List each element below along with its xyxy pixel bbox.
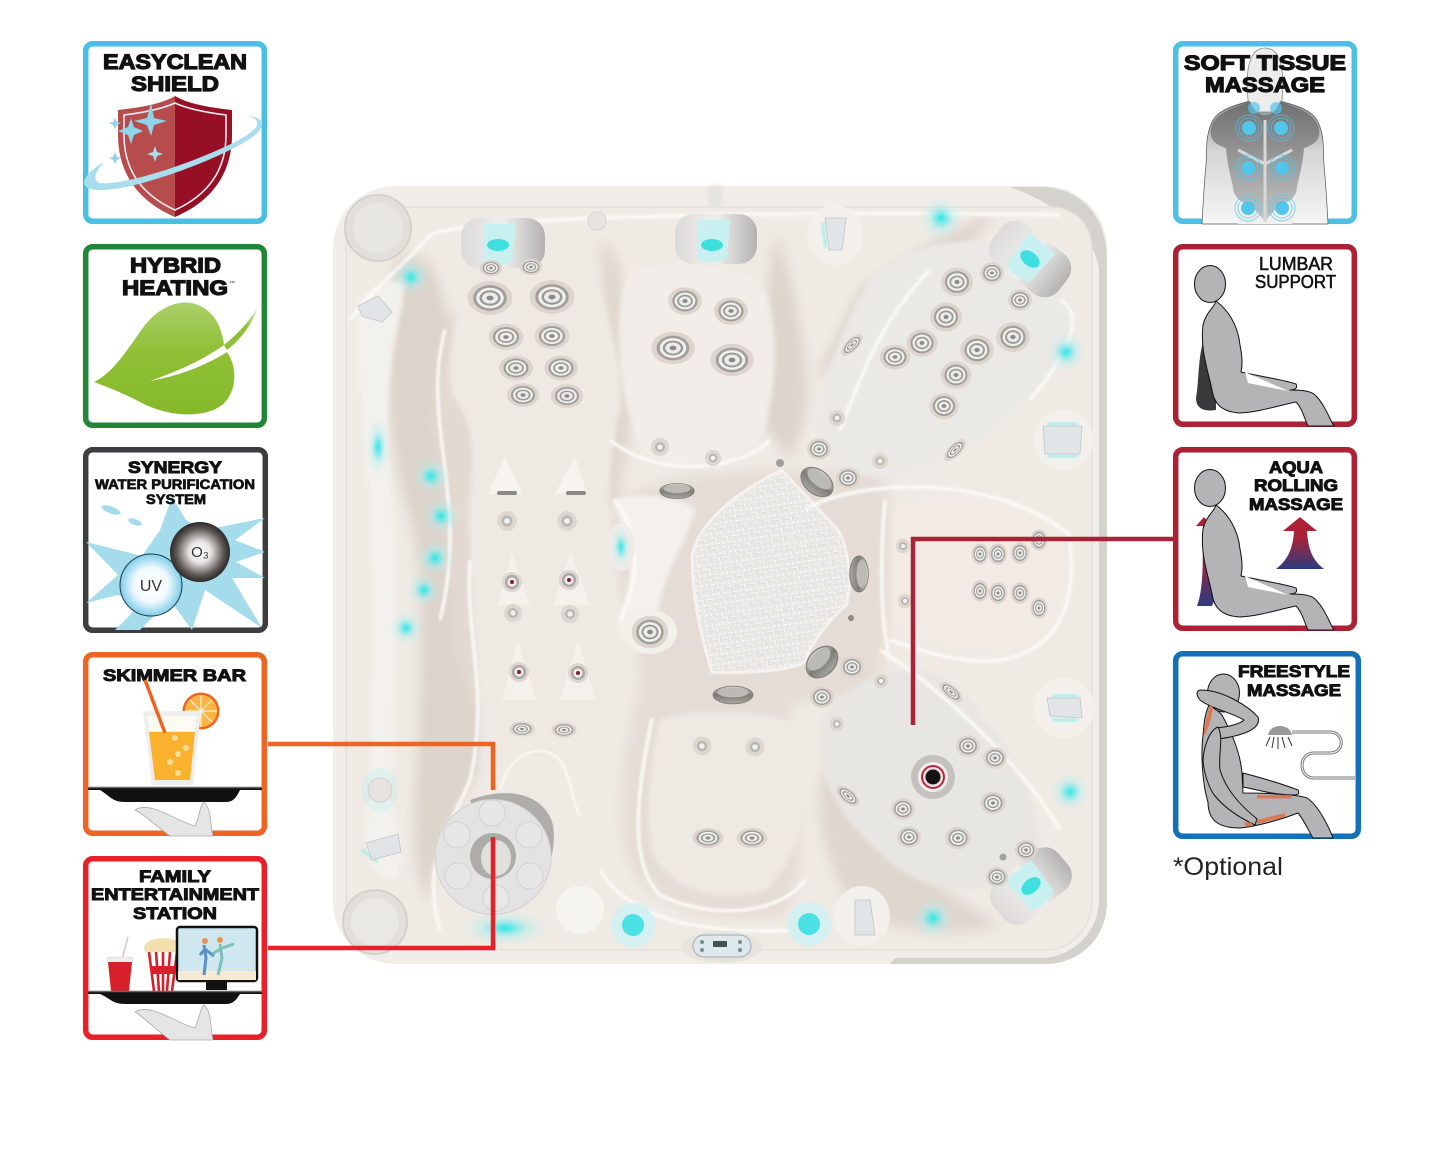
highlights on shell: [350, 214, 1075, 931]
seat: right lounge: [892, 495, 1069, 653]
heading: lumbar support: LUMBAR: [1259, 254, 1333, 274]
icon: water splash: [86, 497, 265, 630]
jets: bottom centre seat: [693, 737, 767, 848]
card: easyclean shield: [84, 44, 264, 221]
footwell tread plate: [692, 470, 849, 673]
icon: UV bubble: [120, 554, 182, 616]
heading: hybrid heating: ™: [229, 280, 235, 287]
card: skimmer bar: [86, 655, 264, 836]
connector: family entertainment station: [268, 837, 493, 948]
pillow bottom right: [983, 840, 1079, 932]
seat: bottom centre: [649, 712, 809, 896]
speaker top left: [345, 195, 411, 261]
shell: grey right edge: [890, 187, 1107, 964]
icon: soda cup: [107, 937, 133, 991]
heading: lumbar support: [1255, 254, 1336, 292]
heading: family entertainment station: ENTERTAINMENT: [91, 885, 260, 904]
icon: serving tray and hand: [88, 787, 262, 836]
heading: soft tissue massage: SOFT TISSUE: [1184, 52, 1346, 75]
card: hybrid heating: [86, 247, 264, 425]
pedestal seat between footwell and centre: [612, 496, 695, 650]
card: synergy water purification: [86, 450, 265, 630]
jets: top centre seat: [651, 287, 754, 466]
icon: tablet: [177, 927, 257, 990]
icon: popcorn: [144, 938, 182, 991]
shell: inner basin: [346, 207, 1092, 950]
jets: middle and right lounge: [713, 529, 1047, 810]
heading: easyclean shield: SHIELD: [131, 73, 219, 96]
icon: rising arrow: [1276, 517, 1324, 569]
icon: hand shower: [1266, 726, 1355, 778]
icon: seated figure: [1194, 470, 1334, 630]
pillow top left: [461, 218, 545, 268]
heading: aqua rolling massage: ROLLING: [1254, 476, 1338, 495]
icon: UV bubble: UV: [140, 578, 162, 595]
connector: aqua rolling massage: [913, 539, 1173, 725]
hot tub shell: [333, 186, 1107, 964]
jets: bottom right seat: [891, 735, 1037, 887]
jets: top right seat: [660, 262, 1032, 503]
card: aqua rolling massage: [1176, 450, 1354, 630]
calf cones and foot jets: [488, 456, 677, 815]
pillow top centre: [675, 214, 757, 264]
seat: top centre: [619, 265, 774, 464]
icon: figure with raised arm: [1197, 674, 1333, 838]
heading: synergy: SYSTEM: [146, 492, 206, 507]
card: family entertainment station: [86, 859, 264, 1040]
heading: family entertainment station: FAMILY: [139, 867, 212, 886]
heading: soft tissue massage: [1184, 52, 1346, 97]
connector: skimmer bar: [268, 744, 493, 790]
icon: O3 bubble: O₃: [191, 544, 209, 561]
heading: soft tissue massage: MASSAGE: [1205, 74, 1325, 97]
heading: aqua rolling massage: MASSAGE: [1249, 495, 1343, 514]
speaker bottom left: [343, 890, 407, 954]
heading: hybrid heating: HYBRID: [130, 254, 221, 278]
heading: family entertainment station: [91, 867, 260, 923]
heading: hybrid heating: [122, 254, 235, 300]
shell: top rim: [333, 186, 1107, 964]
card: soft tissue massage: [1176, 44, 1354, 224]
heading: synergy: WATER PURIFICATION: [95, 477, 255, 492]
jets: left seat: [468, 259, 583, 408]
shading: beige hollows: [388, 215, 1000, 932]
heading: freestyle massage: [1238, 662, 1350, 700]
icon: muscular back: [1202, 48, 1328, 224]
heading: hybrid heating: HEATING: [122, 277, 228, 300]
icon: droplets: [100, 503, 143, 527]
heading: aqua rolling massage: AQUA: [1269, 458, 1323, 477]
valve handles: [358, 205, 1094, 946]
icon: leaf: [94, 302, 258, 414]
pillow top right: [982, 213, 1078, 305]
control panel: [682, 931, 762, 963]
seat: top right corner: [815, 242, 1074, 478]
icon: lumbar cushion: [1196, 342, 1216, 410]
card: freestyle massage: [1176, 654, 1358, 838]
underwater lights: [366, 196, 1090, 947]
heading: synergy: SYNERGY: [128, 458, 223, 477]
skimmer bar disc: [435, 793, 554, 914]
heading: lumbar support: SUPPORT: [1255, 272, 1336, 292]
heading: freestyle massage: FREESTYLE: [1238, 662, 1350, 681]
heading: easyclean shield: [103, 51, 247, 96]
icon: shield: [84, 96, 262, 217]
shading: left rail: [357, 281, 405, 880]
heading: synergy: [95, 458, 255, 507]
note: optional: *Optional: [1173, 853, 1283, 881]
icon: O3 bubble: [170, 522, 230, 582]
icon: serving tray and hand: [88, 991, 262, 1040]
icon: massage highlights: [1203, 705, 1292, 827]
card: lumbar support: [1176, 247, 1354, 426]
seat: left back: [449, 256, 621, 765]
heading: skimmer bar: SKIMMER BAR: [103, 666, 246, 685]
heading: easyclean shield: EASYCLEAN: [103, 51, 247, 74]
heading: family entertainment station: STATION: [133, 904, 217, 923]
shell: waterfall streak: [708, 186, 722, 210]
seat: bottom right corner: [819, 669, 1040, 890]
icon: rolling back arrow: [1196, 517, 1216, 606]
heading: freestyle massage: MASSAGE: [1247, 681, 1341, 700]
icon: seated figure: [1194, 266, 1334, 426]
heading: aqua rolling massage: [1249, 458, 1343, 514]
icon: orange slice: [182, 692, 220, 730]
icon: glass of juice: [143, 680, 201, 785]
